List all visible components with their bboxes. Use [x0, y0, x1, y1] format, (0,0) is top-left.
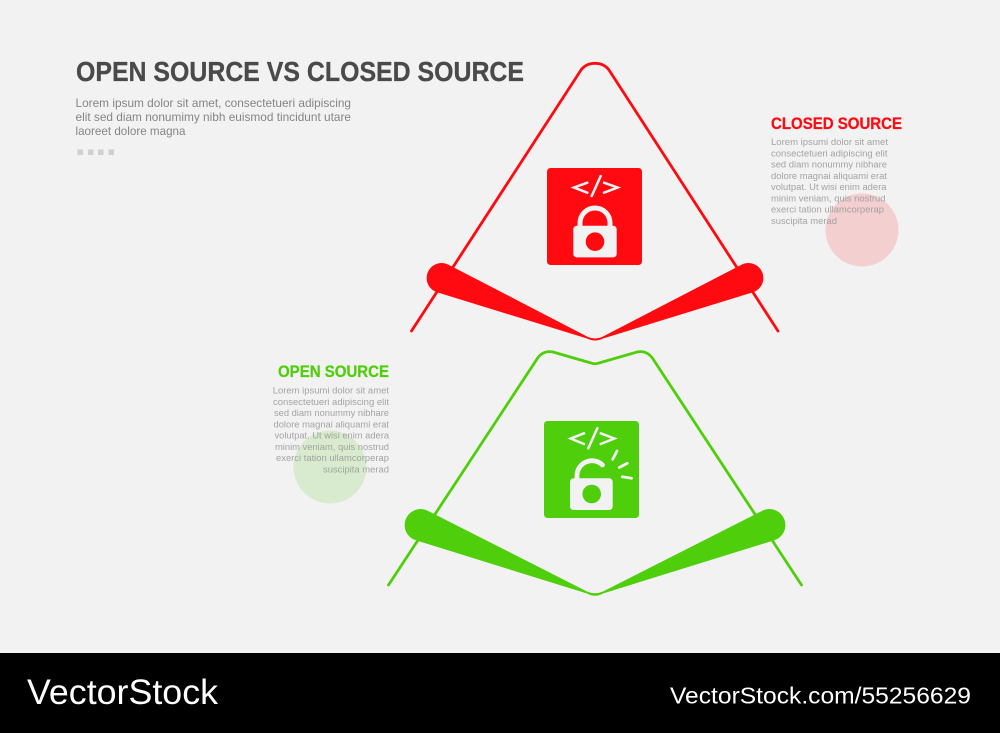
title: OPEN SOURCE VS CLOSED SOURCE: [76, 56, 524, 87]
pagination dots: [78, 150, 114, 155]
open source body: Lorem ipsumi dolor sit amet: [273, 386, 389, 396]
closed source body: dolore magnai aliquami erat: [771, 171, 887, 182]
panel: open source text: [273, 363, 390, 504]
green outline: [388, 352, 802, 585]
watermark footer bar: [0, 653, 1000, 733]
closed source body: exerci tation ullamcorperap: [771, 204, 884, 216]
green blades: [405, 509, 785, 596]
green accent circle: [294, 430, 366, 504]
intro text block: Lorem ipsum dolor sit amet, consectetueri adipiscing: [76, 96, 351, 110]
red blades: [427, 263, 763, 340]
closed source body: minim veniam, quis nostrud: [771, 193, 886, 204]
icon: code lock open: [544, 421, 639, 518]
open source body: consectetueri adipiscing elit: [273, 397, 389, 408]
red triangle outline: [412, 63, 778, 331]
closed source body: suscipita merad: [771, 216, 837, 227]
closed source body: [771, 137, 888, 227]
open source heading: OPEN SOURCE: [278, 363, 389, 381]
closed source body: Lorem ipsumi dolor sit amet: [771, 137, 888, 148]
watermark logo: VectorStock: [27, 673, 219, 712]
open source body: dolore magnai aliquami erat: [274, 419, 389, 430]
closed source body: volutpat. Ut wisi enim adera: [771, 182, 887, 193]
panel: open source diagram: [388, 352, 802, 596]
intro text block: elit sed diam nonumimy nibh euismod tincidunt utare: [76, 110, 351, 124]
open source body: sed diam nonummy nibhare: [274, 408, 389, 419]
closed source body: sed diam nonummy nibhare: [771, 160, 887, 170]
intro text block: laoreet dolore magna: [76, 124, 186, 138]
open source body: minim veniam, quis nostrud: [275, 442, 389, 453]
watermark url: VectorStock.com/55256629: [670, 682, 971, 708]
open source body: [273, 386, 390, 475]
closed source heading: CLOSED SOURCE: [771, 115, 902, 133]
panel: closed source diagram: [412, 63, 778, 341]
open source body: exerci tation ullamcorperap: [276, 453, 389, 464]
intro text block: [76, 96, 351, 138]
icon: code lock closed: [547, 168, 642, 265]
open source body: volutpat. Ut wisi enim adera: [274, 430, 390, 442]
closed source body: consectetueri adipiscing elit: [771, 148, 888, 159]
open source body: suscipita merad: [323, 464, 389, 475]
red accent circle: [826, 194, 898, 266]
panel: closed source text: [771, 115, 902, 266]
